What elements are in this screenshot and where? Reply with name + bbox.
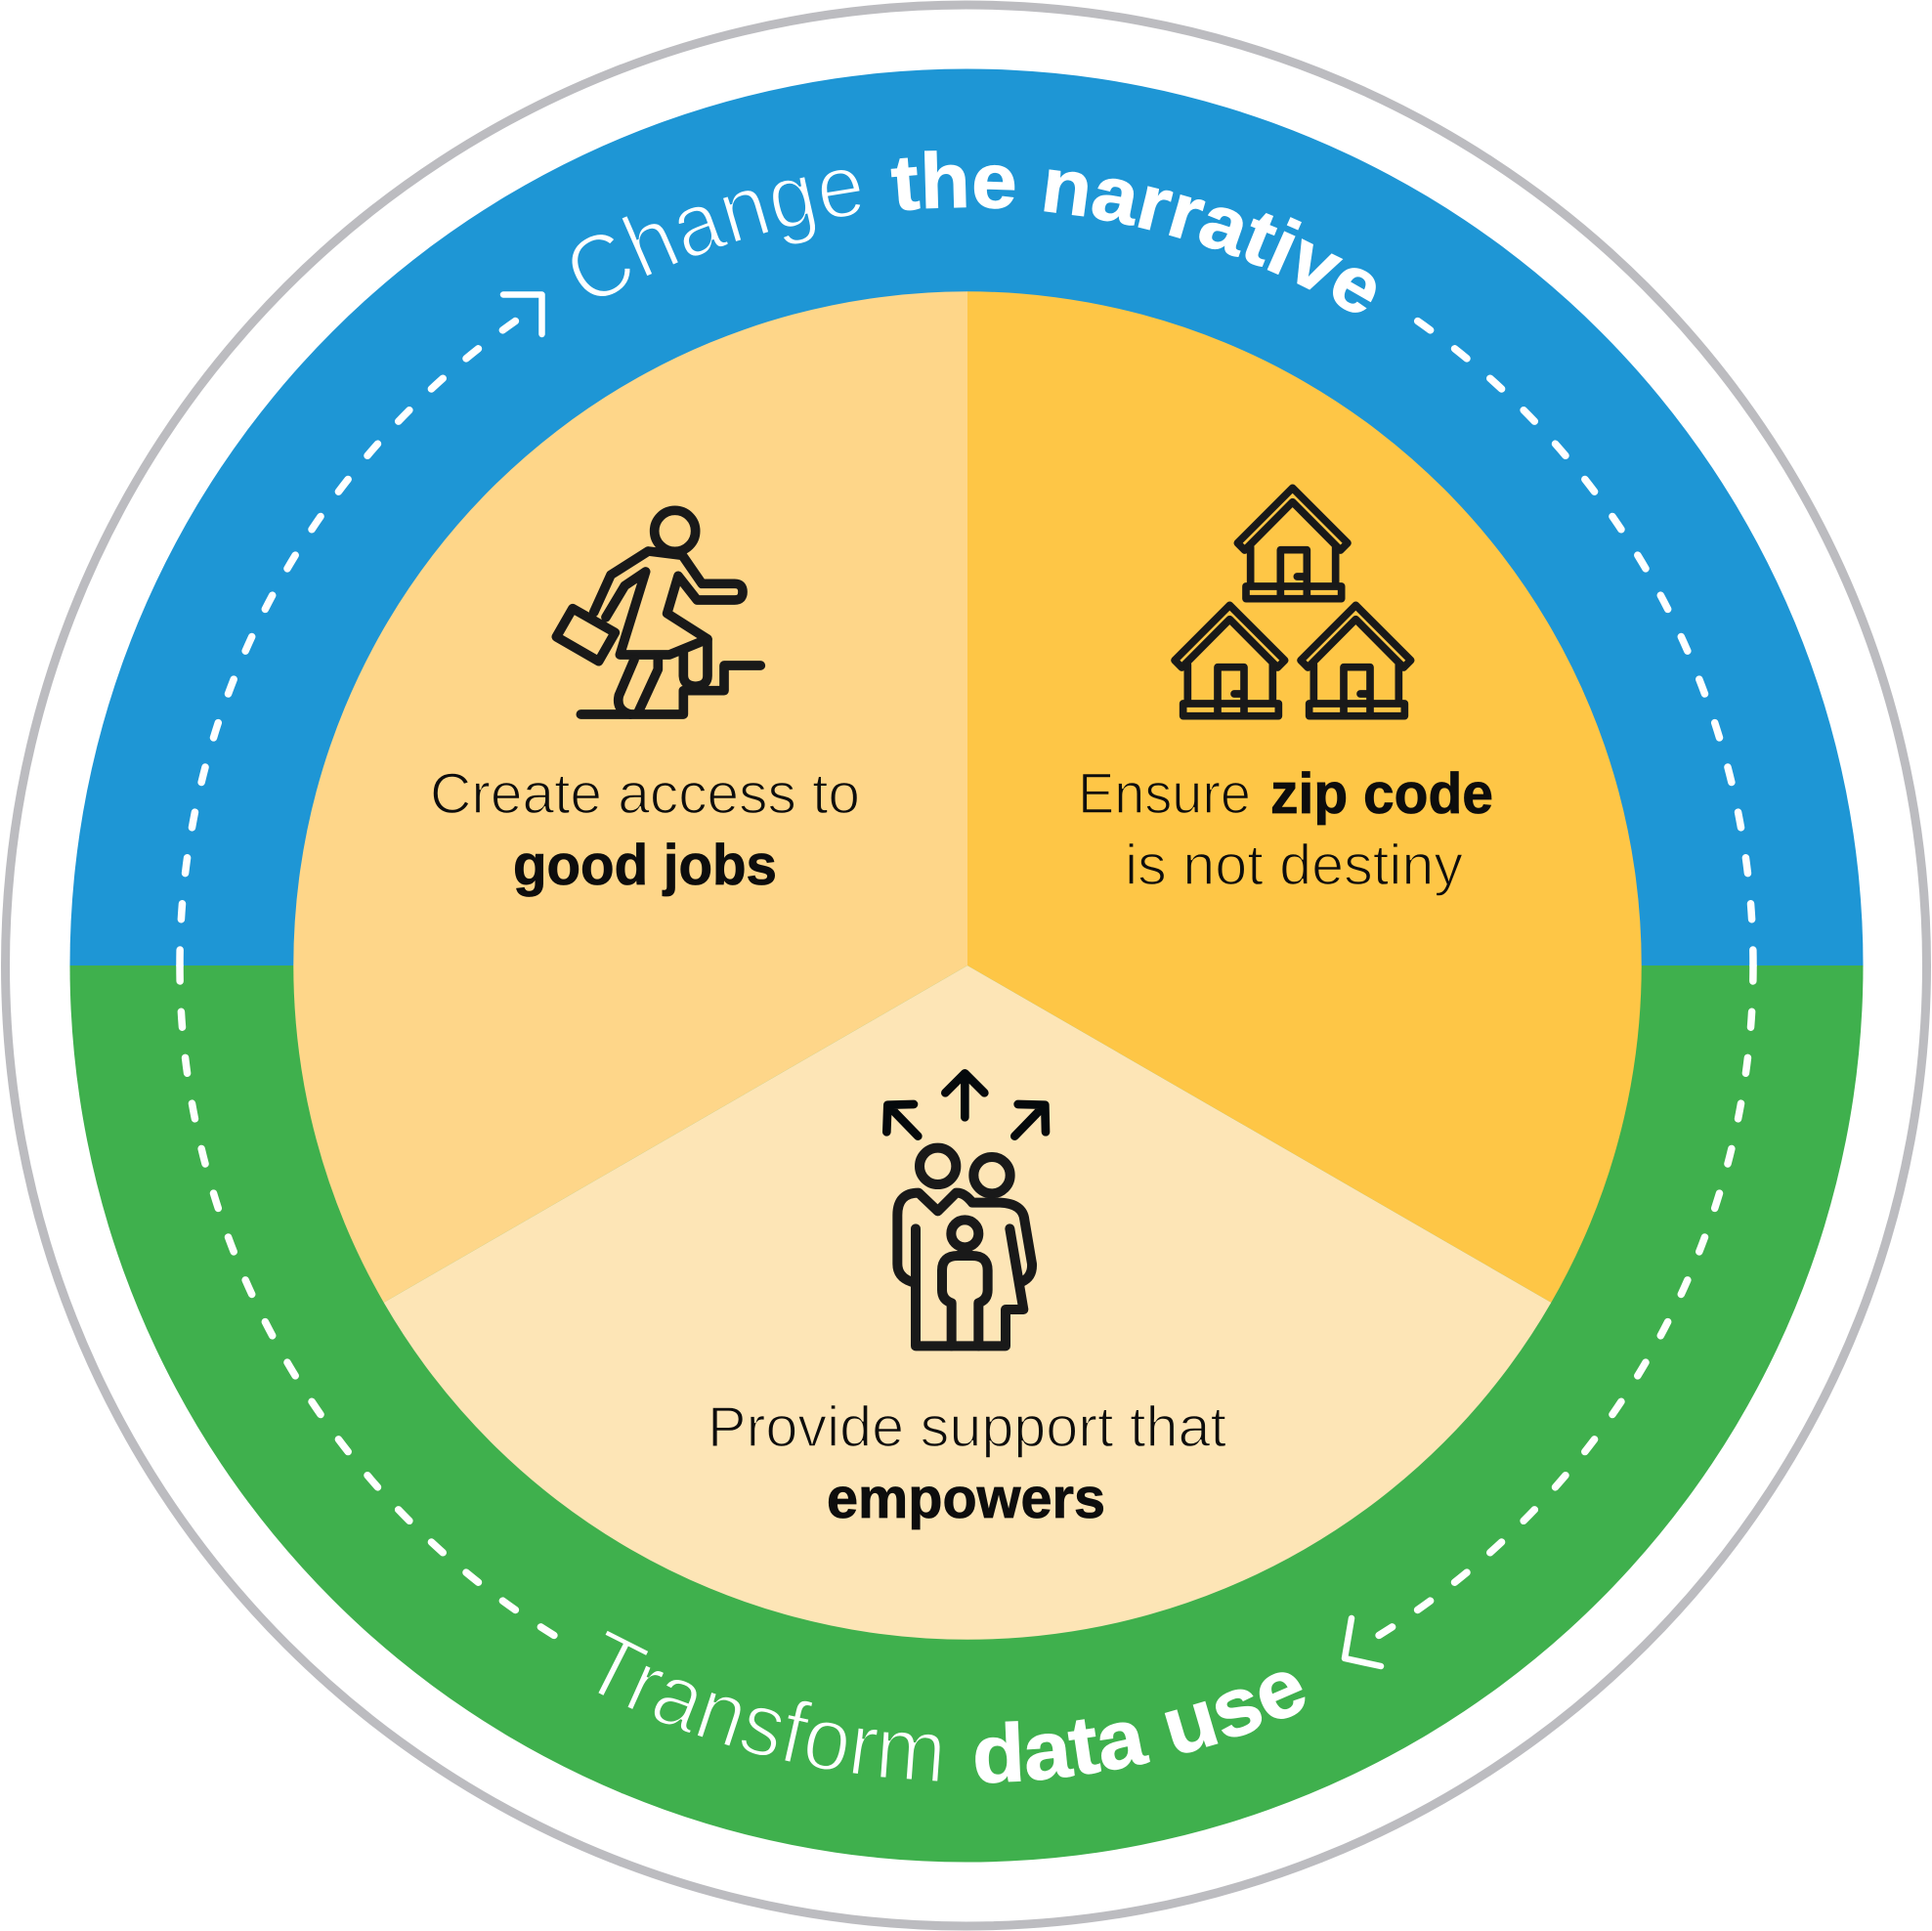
curved heading: Transform: Transform [598, 1630, 940, 1781]
icon: three houses [1175, 488, 1411, 716]
icon: woman with briefcase climbing stairs [556, 510, 760, 714]
text: provide support that empowers [708, 1395, 1226, 1530]
dashed circular arrow: bottom right arc with arrowhead [1345, 966, 1753, 1666]
text: ensure zip code is not destiny: zip code [1270, 762, 1493, 826]
band: green bottom half [70, 966, 1863, 1863]
text: ensure zip code is not destiny [1078, 762, 1493, 897]
panel: zip code sector [967, 291, 1642, 1303]
curved heading: data use: data use [975, 1672, 1306, 1783]
text: provide support that empowers: empowers [827, 1467, 1105, 1530]
text: create access to good jobs: good jobs [513, 834, 777, 897]
dashed circular arrow: bottom left arc [180, 966, 554, 1636]
text: ensure zip code is not destiny: Ensure [1078, 762, 1251, 826]
text: create access to good jobs: Create access to [430, 762, 860, 826]
text: ensure zip code is not destiny: is not destiny [1125, 834, 1463, 897]
text: create access to good jobs [430, 762, 860, 897]
band: blue top half [70, 69, 1863, 966]
dashed circular arrow: top left arc with arrowhead [180, 295, 541, 966]
dashed circular arrow: top right arc [1418, 322, 1753, 966]
text: provide support that empowers: Provide support that [708, 1395, 1226, 1459]
icon: family with three arrows [886, 1073, 1046, 1346]
panel: create access to good jobs sector [293, 291, 967, 1303]
curved heading: the narrative: the narrative [891, 150, 1376, 313]
panel: provide support sector [384, 966, 1551, 1640]
curved heading: Change: Change [573, 170, 860, 296]
